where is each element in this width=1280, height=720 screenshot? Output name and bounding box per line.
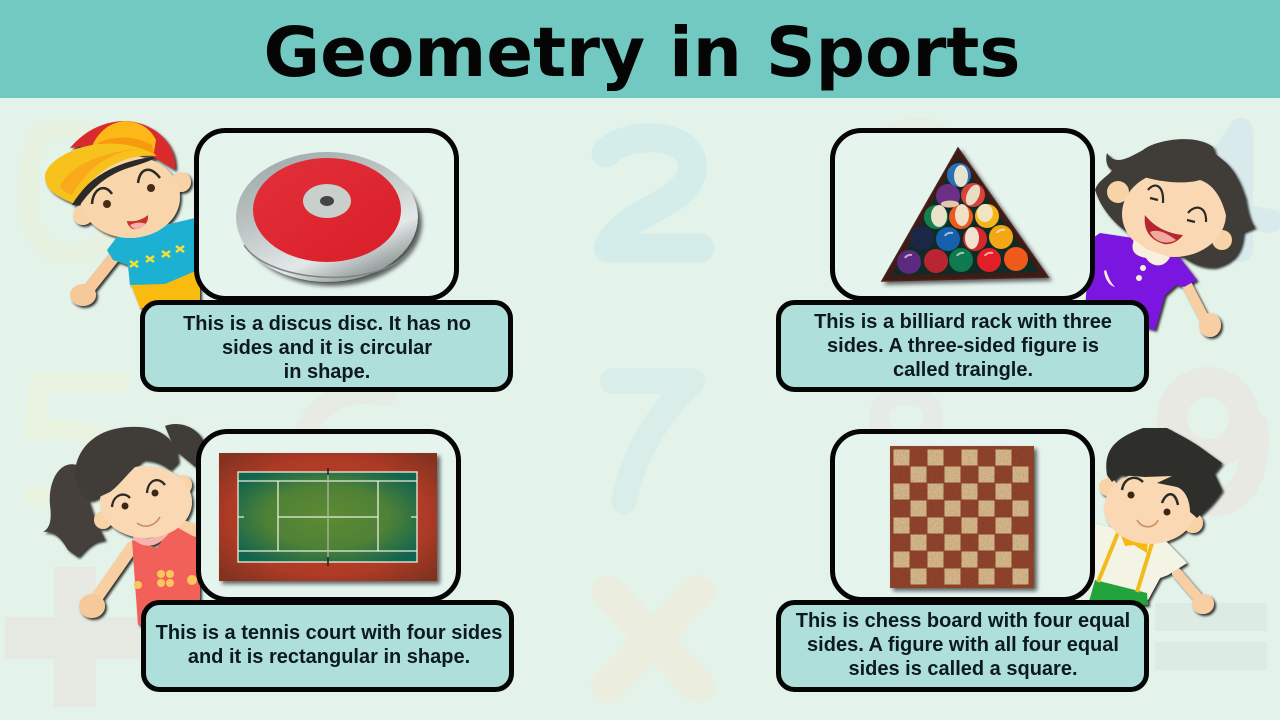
panel: discus bbox=[142, 130, 510, 390]
caption: discus: This is a discus disc. It has no bbox=[183, 313, 471, 335]
icon: chess board bbox=[890, 446, 1034, 588]
icon: discus disc bbox=[236, 152, 419, 283]
caption: chess board bbox=[778, 602, 1146, 690]
caption: billiard rack: This is a billiard rack with three bbox=[814, 311, 1112, 333]
icon: tennis court bbox=[219, 453, 437, 581]
character: boy with bow tie bbox=[1088, 428, 1222, 614]
caption: discus: sides and it is circular bbox=[222, 337, 432, 359]
header band bbox=[0, 0, 1280, 98]
caption: tennis court: and it is rectangular in shape. bbox=[188, 646, 470, 668]
image frame bbox=[198, 432, 458, 600]
caption: chess board: sides is called a square. bbox=[848, 658, 1078, 680]
caption: discus bbox=[142, 302, 510, 390]
image frame bbox=[196, 130, 456, 298]
caption: billiard rack bbox=[778, 302, 1146, 390]
caption: discus: in shape. bbox=[284, 361, 370, 383]
caption: chess board: This is chess board with four equal bbox=[796, 610, 1130, 632]
icon: billiard rack bbox=[882, 148, 1048, 281]
caption: tennis court bbox=[144, 602, 512, 690]
image frame bbox=[832, 130, 1092, 298]
character: laughing girl bbox=[1085, 139, 1255, 337]
panel: tennis court bbox=[144, 432, 512, 690]
character: boy with cap bbox=[45, 121, 200, 308]
panel: chess board bbox=[778, 432, 1146, 690]
caption: tennis court: This is a tennis court with four sides bbox=[156, 622, 502, 644]
caption: billiard rack: sides. A three-sided figure is bbox=[827, 335, 1099, 357]
caption: billiard rack: called traingle. bbox=[893, 359, 1033, 381]
caption: chess board: sides. A figure with all four equal bbox=[807, 634, 1119, 656]
image frame bbox=[832, 432, 1092, 600]
panel: billiard rack bbox=[778, 130, 1146, 390]
faded background numerals bbox=[5, 128, 1270, 707]
character: girl with ponytails bbox=[43, 424, 205, 625]
title: Geometry in Sports bbox=[264, 13, 1020, 93]
